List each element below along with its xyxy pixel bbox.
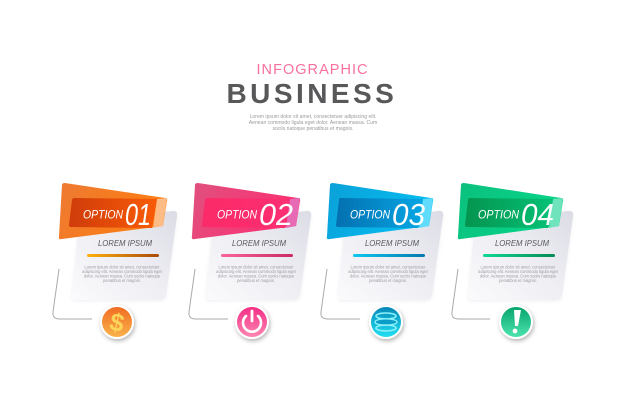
progress bar (87, 254, 159, 257)
card body (338, 211, 443, 300)
option label: OPTION (478, 210, 520, 222)
option label: OPTION (217, 210, 258, 222)
icon: dollar (100, 305, 134, 339)
connector line (452, 269, 490, 319)
description: penatibus et magnis. (369, 278, 407, 283)
banner tab (286, 198, 300, 228)
description (478, 264, 559, 283)
icon: power (235, 305, 269, 339)
card body (468, 211, 573, 300)
heading: LOREM IPSUM (365, 238, 419, 248)
title: infographic: INFOGRAPHIC (256, 62, 368, 78)
title: business: BUSINESS (226, 78, 397, 109)
banner tab (153, 198, 167, 228)
intro text: Aenean commodo ligula eget dolor. Aenean massa. Cum (249, 120, 377, 126)
description: Lorem ipsum dolor sit amet, consectetuer (350, 264, 426, 270)
intro text (249, 114, 377, 132)
connector line (189, 269, 228, 319)
panel: option 02 (189, 183, 311, 339)
option label: OPTION (350, 210, 391, 222)
description: penatibus et magnis. (103, 278, 141, 283)
option number: 01 (125, 197, 151, 232)
card body (206, 211, 311, 300)
banner tab (549, 198, 563, 228)
banner label (465, 198, 553, 228)
heading: LOREM IPSUM (98, 238, 152, 248)
banner label (69, 198, 157, 228)
description: penatibus et magnis. (499, 278, 537, 283)
progress bar (483, 254, 555, 257)
icon: exclamation (499, 305, 533, 339)
option number: 03 (392, 197, 425, 232)
description (348, 264, 429, 283)
description: penatibus et magnis. (237, 278, 275, 283)
connector line (321, 269, 360, 319)
intro text: Lorem ipsum dolor sit amet, consectetuer adipiscing elit. (250, 114, 376, 120)
description: adipiscing elit. Aenean commodo ligula eget (478, 269, 559, 274)
icon: layers (369, 305, 403, 339)
option label: OPTION (83, 210, 124, 222)
heading: LOREM IPSUM (232, 238, 286, 248)
description: Lorem ipsum dolor sit amet, consectetuer (218, 264, 294, 270)
icon: dollar: $ (107, 308, 127, 338)
banner (327, 183, 433, 239)
description: adipiscing elit. Aenean commodo ligula eget (348, 269, 429, 274)
banner label (202, 198, 290, 228)
description: dolor. Aenean massa. Cum sociis natoque (480, 274, 557, 278)
panel: option 03 (321, 183, 443, 339)
progress bar (221, 254, 293, 257)
progress bar (353, 254, 425, 257)
banner (192, 183, 300, 239)
description: Lorem ipsum dolor sit amet, consectetuer (84, 264, 160, 270)
description: dolor. Aenean massa. Cum sociis natoque (218, 274, 295, 278)
intro text: sociis natoque penatibus et magnis. (272, 126, 354, 132)
card body (72, 211, 177, 300)
panel: option 04 (452, 183, 573, 339)
banner label (336, 198, 423, 228)
description: Lorem ipsum dolor sit amet, consectetuer (480, 264, 556, 270)
description: adipiscing elit. Aenean commodo ligula eget (216, 269, 297, 274)
heading: LOREM IPSUM (495, 238, 549, 248)
connector line (53, 269, 92, 319)
banner tab (419, 198, 433, 228)
description (216, 264, 297, 283)
banner (59, 183, 167, 239)
option number: 02 (259, 197, 293, 232)
banner (458, 183, 563, 239)
description: dolor. Aenean massa. Cum sociis natoque (350, 274, 427, 278)
description: adipiscing elit. Aenean commodo ligula eget (82, 269, 163, 274)
description (82, 264, 163, 283)
description: dolor. Aenean massa. Cum sociis natoque (84, 274, 161, 278)
panel: option 01 (53, 183, 177, 339)
option number: 04 (521, 197, 554, 232)
